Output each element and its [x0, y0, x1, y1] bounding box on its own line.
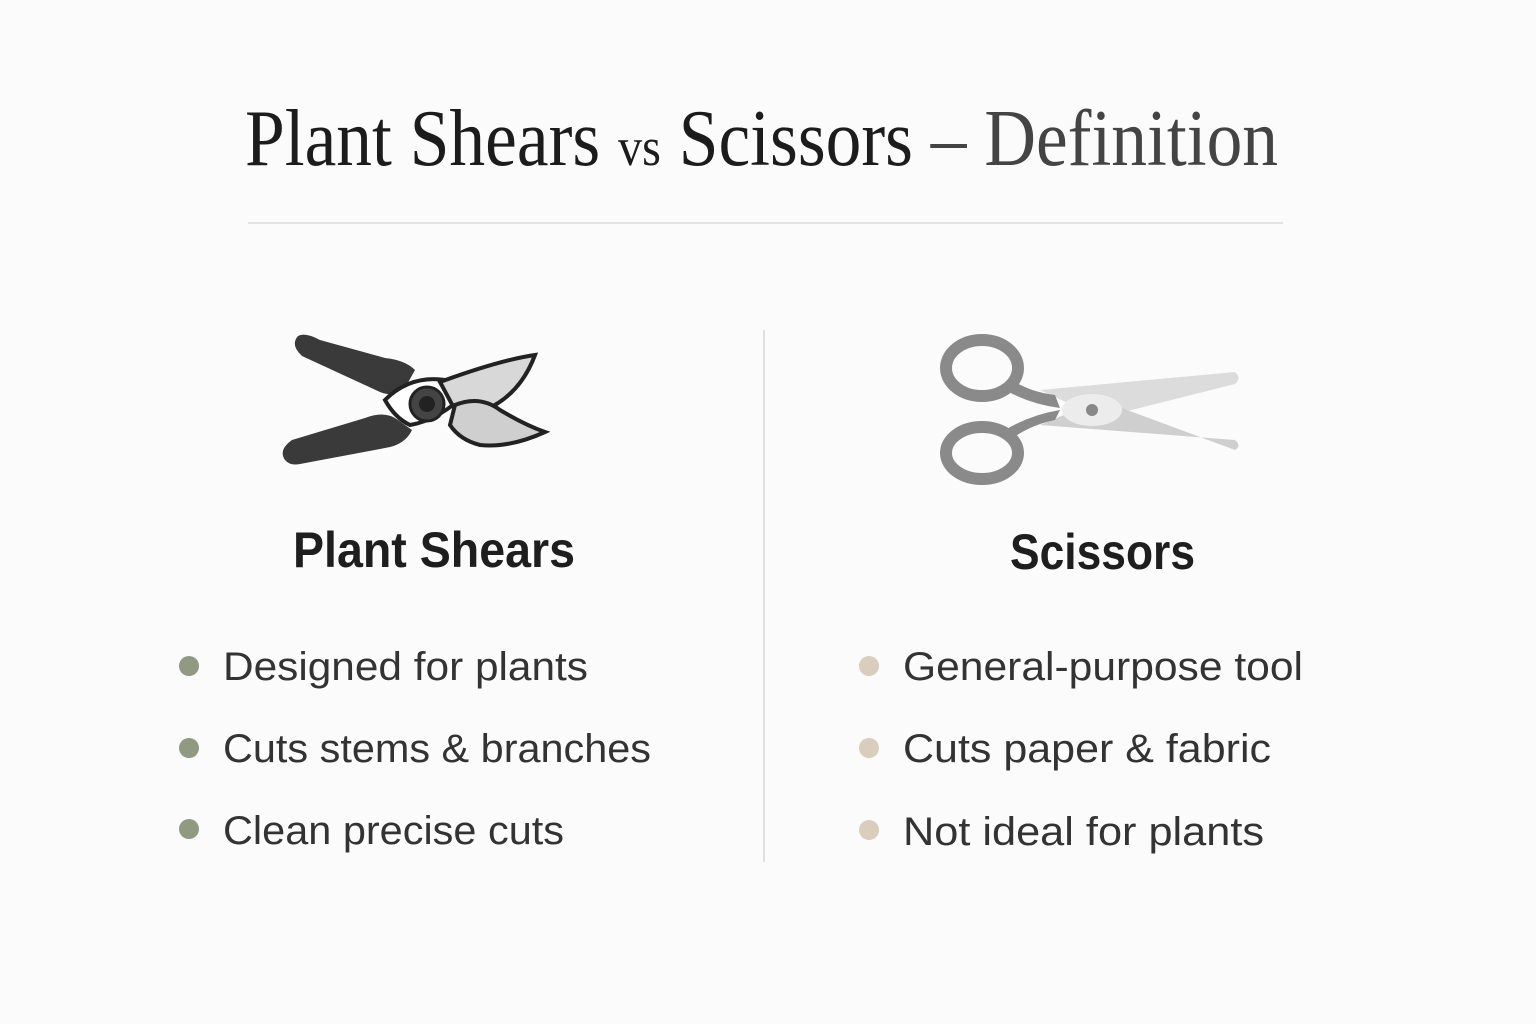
heading: Plant Shears: Plant Shears [293, 522, 575, 578]
list: plant shears bullets [179, 645, 651, 853]
list: plant shears bullets: Clean precise cuts [223, 809, 564, 853]
panel: plant shears [179, 335, 651, 853]
panel: scissors [859, 340, 1303, 854]
list: scissors bullets: Not ideal for plants [903, 810, 1264, 854]
list: scissors bullets: General-purpose tool [903, 645, 1303, 689]
list: scissors bullets: Cuts paper & fabric [903, 727, 1271, 771]
title: Plant Shears vs Scissors – Definition [245, 95, 1278, 183]
list: plant shears bullets: Cuts stems & branches [223, 727, 651, 771]
icon: scissors [946, 340, 1238, 479]
icon: pruning shears [283, 335, 545, 464]
list: plant shears bullets: Designed for plants [223, 645, 588, 689]
list: scissors bullets [859, 645, 1303, 854]
heading: Scissors: Scissors [1010, 524, 1195, 580]
